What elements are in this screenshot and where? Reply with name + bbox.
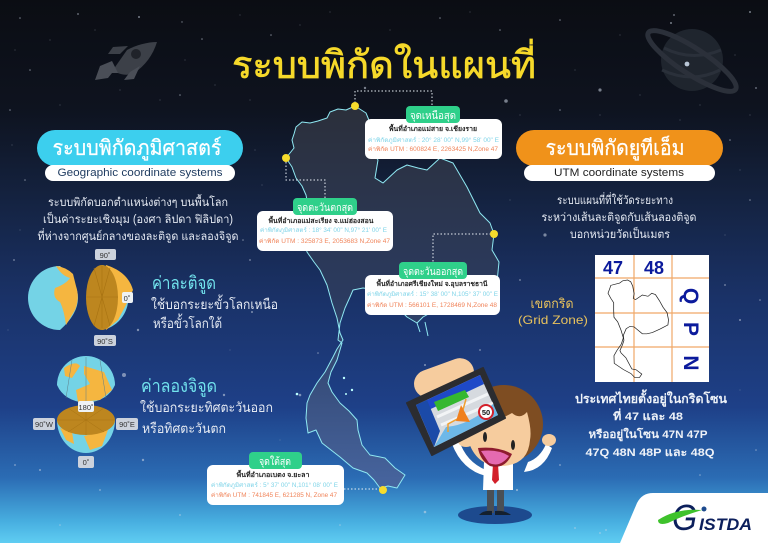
dotted leader: east — [433, 234, 491, 262]
callout: west: ค่าพิกัด UTM : 325873 E, 2053683 N,Zone 47 — [259, 238, 391, 245]
text block: UTM description: ระบบแผนที่ที่ใช้วัดระยะทาง — [557, 192, 673, 207]
panel heading: geographic coordinate systems — [37, 130, 243, 181]
diagram: latitude globes: 0˚ — [124, 294, 130, 303]
illustration: man holding GPS tablet — [407, 354, 556, 524]
panel heading: geographic coordinate systems: Geographic coordinate systems — [58, 167, 223, 179]
callout: east: พื้นที่อำเภอศรีเชียงใหม่ จ.อุบลราชธานี — [376, 278, 488, 288]
diagram: longitude globes: 90˚E — [119, 420, 135, 429]
icon: rocket — [95, 42, 157, 80]
callout: east: จุดตะวันออกสุด — [403, 266, 463, 278]
marker: south — [379, 486, 387, 494]
callout: south: พื้นที่อำเภอเบตง จ.ยะลา — [236, 469, 310, 479]
chart: UTM grid zones: Q — [679, 288, 702, 304]
text block: latitude: หรือขั้วโลกใต้ — [153, 313, 222, 331]
illustration: man holding GPS tablet: 50 — [482, 408, 490, 417]
diagram: longitude globes: 0˚ — [83, 458, 89, 467]
text block: geographic description: เป็นค่าระยะเชิงมุม (องศา ลิปดา ฟิลิปดา) — [43, 211, 233, 226]
text block: latitude: ใช้บอกระยะขั้วโลกเหนือ — [151, 294, 278, 312]
callout: north: ค่าพิกัด UTM : 600824 E, 2263425 N,Zone 47 — [368, 146, 499, 153]
marker: north — [351, 102, 359, 110]
marker: west — [282, 154, 290, 162]
icon: ringed planet — [641, 22, 743, 100]
marker: east — [490, 230, 498, 238]
text block: UTM description: บอกหน่วยวัดเป็นเมตร — [570, 226, 670, 241]
callout: south — [207, 452, 344, 505]
callout: west: จุดตะวันตกสุด — [297, 202, 353, 214]
chart: UTM grid zones: 48 — [644, 258, 664, 278]
title: ระบบพิกัดในแผนที่ — [232, 39, 536, 87]
text block: latitude: ค่าละติจูด — [152, 273, 216, 294]
callout: east: ค่าพิกัด UTM : 566101 E, 1728469 N,Zone 48 — [367, 302, 498, 309]
label: grid zone — [518, 296, 588, 327]
text block: Thailand grid zones: ประเทศไทยตั้งอยู่ในกริดโซน — [575, 389, 727, 407]
logo: GISTDA — [620, 493, 768, 543]
panel heading: UTM coordinate systems — [516, 130, 723, 181]
label: grid zone: เขตกริด — [530, 296, 574, 311]
text block: UTM description: ระหว่างเส้นละติจูดกับเส้นลองติจูด — [542, 211, 696, 224]
callout: north — [365, 106, 502, 159]
callout: east — [365, 262, 500, 315]
text block: longitude — [140, 376, 273, 436]
diagram: longitude globes: 90˚W — [35, 420, 54, 429]
text block: Thailand grid zones: 47Q 48N 48P และ 48Q — [586, 447, 715, 459]
chart: UTM grid zones: N — [679, 355, 702, 371]
text block: longitude: ค่าลองจิจูด — [141, 376, 217, 397]
label: grid zone: (Grid Zone) — [518, 313, 588, 327]
callout: east: ค่าพิกัดภูมิศาสตร์ : 15° 38' 00" N,105° 37' 00" E — [367, 290, 498, 298]
text block: geographic description — [38, 194, 238, 243]
callout: north: พื้นที่อำเภอแม่สาย จ.เชียงราย — [389, 123, 477, 133]
panel heading: UTM coordinate systems: UTM coordinate systems — [554, 167, 685, 179]
text block: geographic description: ระบบพิกัดบอกตำแหน่งต่างๆ บนพื้นโลก — [48, 194, 228, 209]
logo: GISTDA: ISTDA — [699, 515, 752, 534]
logo: GISTDA: G — [672, 497, 697, 538]
diagram: longitude globes: 180˚ — [78, 403, 94, 412]
diagram: latitude globes: 90˚S — [97, 337, 113, 346]
diagram: longitude globes — [33, 356, 138, 468]
panel heading: UTM coordinate systems: ระบบพิกัดยูทีเอ็ม — [546, 134, 684, 161]
text block: Thailand grid zones — [575, 389, 727, 459]
text block: UTM description — [542, 192, 696, 241]
chart: UTM grid zones — [595, 255, 709, 382]
dotted leader: south — [344, 488, 380, 490]
callout: west — [257, 198, 393, 251]
text block: latitude — [151, 273, 278, 331]
map of Thailand — [286, 106, 499, 488]
dotted leader: west — [286, 162, 325, 198]
text block: longitude: ใช้บอกระยะทิศตะวันออก — [140, 399, 273, 415]
diagram: latitude globes: 90˚ — [100, 251, 110, 260]
chart: UTM grid zones: 47 — [603, 258, 623, 278]
callout: north: จุดเหนือสุด — [410, 109, 456, 122]
dotted leader: north — [355, 91, 432, 106]
callout: west: ค่าพิกัดภูมิศาสตร์ : 18° 34' 00" N,97° 21' 00" E — [260, 226, 387, 234]
callout: south: ค่าพิกัดภูมิศาสตร์ : 5° 37' 00" N,101° 08' 00" E — [211, 481, 338, 489]
panel heading: geographic coordinate systems: ระบบพิกัดภูมิศาสตร์ — [52, 136, 222, 161]
text block: Thailand grid zones: หรืออยู่ในโซน 47N 47P — [588, 427, 708, 442]
callout: west: พื้นที่อำเภอแม่สะเรียง จ.แม่ฮ่องสอน — [268, 215, 374, 225]
text block: geographic description: ที่ห่างจากศูนย์กลางของละติจูด และลองจิจูด — [38, 228, 238, 243]
text block: Thailand grid zones: ที่ 47 และ 48 — [613, 408, 683, 423]
chart: UTM grid zones: P — [679, 322, 702, 336]
callout: south: จุดใต้สุด — [259, 455, 291, 468]
text block: longitude: หรือทิศตะวันตก — [142, 421, 226, 436]
diagram: latitude globes — [28, 249, 133, 346]
callout: south: ค่าพิกัด UTM : 741845 E, 621285 N, Zone 47 — [211, 492, 338, 499]
callout: north: ค่าพิกัดภูมิศาสตร์ : 20° 28' 00" N,99° 58' 00" E — [368, 136, 499, 144]
